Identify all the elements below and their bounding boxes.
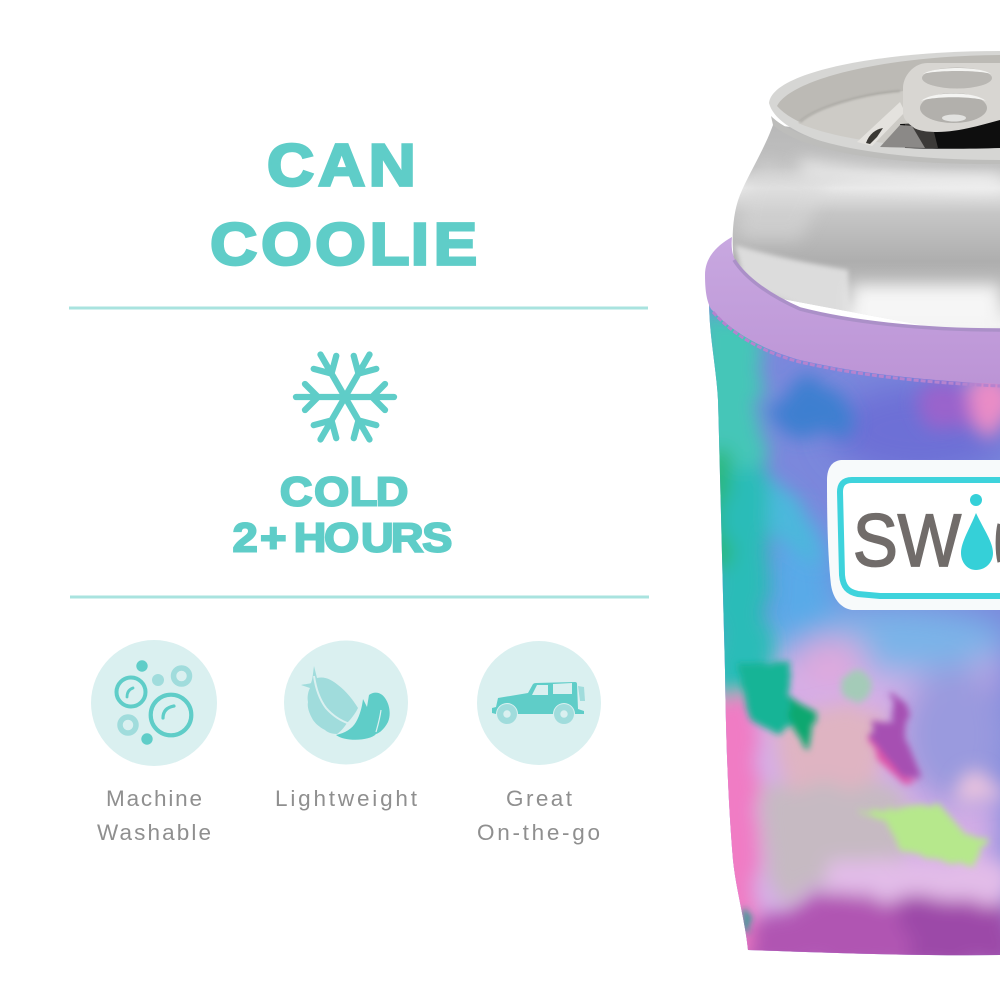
icon: feather <box>284 640 408 764</box>
title: Can Coolie <box>210 133 477 278</box>
icon: jeep <box>477 641 601 765</box>
logo patch <box>827 460 1000 610</box>
logo wordmark: SW <box>853 499 961 582</box>
feature: lightweight <box>275 640 418 811</box>
heading: cold 2+ hours: COLD <box>280 469 408 515</box>
feature: machine washable <box>91 640 217 845</box>
label: great on-the-go <box>477 786 600 845</box>
pull tab <box>903 63 1000 132</box>
heading: cold 2+ hours: 2+ HOURS <box>233 515 452 561</box>
icon: bubbles <box>91 640 217 766</box>
sleeve collar <box>705 237 1000 384</box>
logo water drop <box>961 494 993 570</box>
sleeve watercolor print <box>700 300 1000 970</box>
heading: cold 2+ hours <box>233 469 452 561</box>
can body <box>733 125 1000 340</box>
can rim and lid <box>769 51 1000 164</box>
icon: snowflake <box>296 348 394 446</box>
label: lightweight: Lightweight <box>275 786 418 811</box>
label: great on-the-go: On-the-go <box>477 820 600 845</box>
title: Can Coolie: CAN <box>267 133 416 199</box>
label: machine washable: Washable <box>97 820 211 845</box>
product photo: aluminium can in a watercolor coolie <box>700 51 1000 970</box>
title: Can Coolie: COOLIE <box>210 212 477 278</box>
can opening <box>900 120 1000 149</box>
feature: great on-the-go <box>477 641 601 845</box>
label: machine washable: Machine <box>106 786 202 811</box>
label: machine washable <box>97 786 211 845</box>
label: great on-the-go: Great <box>506 786 573 811</box>
